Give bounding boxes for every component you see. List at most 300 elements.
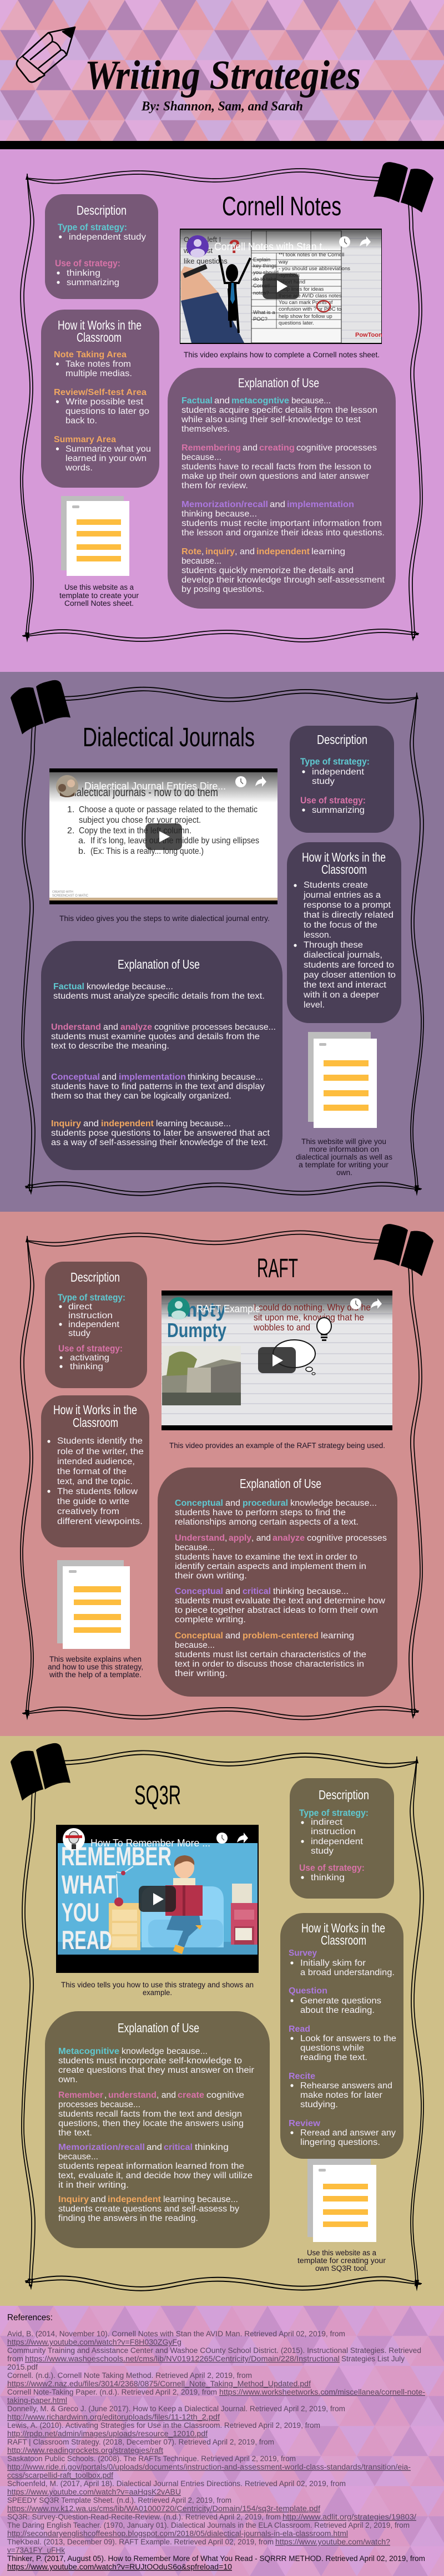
- panel: explanation of use: learning because...: [163, 2195, 238, 2204]
- title: Writing Strategies: [85, 53, 361, 98]
- video: How To Remember More: How To Remember More ...: [90, 1838, 210, 1849]
- panel: explanation of use: thinking because...: [188, 1072, 263, 1082]
- caption: website link: a template for writing your: [299, 1161, 389, 1169]
- frame and book icon: [11, 680, 423, 1196]
- reference list: Community Training and Assistance Center and Washoe COunty School District. (2015). Instructional Strategies. Retrieved: [7, 2346, 421, 2355]
- caption: website link: template for creating your: [297, 2256, 386, 2265]
- black divider band: [0, 141, 444, 149]
- panel: how it works: Read: [289, 2025, 310, 2034]
- panel: description: Type of strategy:: [299, 1808, 369, 1818]
- reference list: https://www2.naz.edu/files/3014/2368/0875/Cornell_Note_Taking_Method_Updated.pdf: [7, 2380, 311, 2388]
- panel: explanation of use: analyze: [120, 1023, 152, 1032]
- panel: how it works: Classroom: [321, 862, 367, 877]
- panel: how it works: Summarize what you: [65, 444, 151, 454]
- video: Cornell Notes with Stan: POC?: [253, 316, 268, 322]
- panel: explanation of use: students recall facts from the text and design: [58, 2109, 242, 2119]
- panel: explanation of use: students have to recall facts from the lesson to: [181, 462, 371, 472]
- panel: how it works: different viewpoints.: [57, 1517, 143, 1526]
- caption: video: example.: [143, 1988, 172, 1997]
- panel: how it works: How it Works in the: [301, 1921, 385, 1935]
- panel: explanation of use: because...: [175, 1641, 215, 1650]
- panel: how it works: pay closer attention to: [304, 970, 396, 980]
- references heading: References:: [7, 2313, 53, 2322]
- panel: explanation of use: relationships among certain aspects of a text.: [175, 1517, 359, 1527]
- video: Dialectical Journal Entries: a.: [78, 836, 85, 846]
- panel: explanation of use: , and: [251, 1534, 271, 1543]
- panel: explanation of use: students have to perform steps to find the: [175, 1508, 346, 1517]
- icon: document: [57, 1560, 130, 1649]
- reference list: https://www.youtube.com/watch?v=aaHqsK2vABU: [7, 2488, 181, 2496]
- heading: Cornell Notes: Cornell Notes: [222, 192, 341, 221]
- panel: explanation of use: critical: [164, 2143, 193, 2152]
- caption: website link: [297, 2249, 386, 2273]
- panel: description: thinking: [67, 269, 100, 278]
- panel: how it works: dialectical journals,: [304, 950, 382, 960]
- panel: description: Use of strategy:: [299, 1863, 365, 1873]
- caption: website link: more information on: [309, 1145, 379, 1153]
- panel: description: direct: [68, 1302, 93, 1312]
- panel: explanation of use: own.: [58, 2075, 78, 2084]
- reference list: [7, 2330, 425, 2571]
- panel: description: [45, 1262, 147, 1388]
- panel: explanation of use: students must list certain characteristics of the: [175, 1650, 366, 1659]
- panel: explanation of use: apply: [229, 1534, 251, 1543]
- panel: how it works: journal entries as a: [303, 890, 381, 900]
- panel: explanation of use: independent: [101, 1119, 154, 1128]
- video: Cornell Notes with Stan: -symbols: [279, 272, 300, 279]
- panel: how it works: make notes for later: [300, 2091, 382, 2100]
- video: Cornell Notes with Stan: do to take: [253, 276, 276, 282]
- reference list: http://secondaryenglishcoffeeshop.blogspot.com/2018/05/dialectical-journals-in-ela-classroom.html: [7, 2529, 348, 2538]
- panel: explanation of use: Remembering: [181, 443, 241, 453]
- panel: explanation of use: Understand: [51, 1023, 101, 1032]
- reference list: Thinker, P. (2017, August 05). How to Remember More of What You Read - SQRRR METHOD. Retrieved April 02, 2019, from: [7, 2554, 425, 2563]
- panel: description: independent: [312, 767, 365, 777]
- panel: how it works: [41, 1395, 149, 1547]
- panel: how it works: words.: [65, 463, 93, 473]
- panel: explanation of use: them so that they can be logically organized.: [51, 1091, 231, 1101]
- reference list: Donnelly, M. & Greco J. (June 2017). How to Keep a Dialectical Journal. Retrieved April 2, 2019, from: [7, 2405, 345, 2413]
- video: Cornell Notes with Stan: help show for follow up: [279, 313, 332, 320]
- panel: description: Type of strategy:: [300, 757, 370, 767]
- panel: how it works: lesson.: [304, 930, 331, 940]
- panel: how it works: studying.: [300, 2100, 338, 2109]
- panel: description: independent: [311, 1837, 364, 1846]
- panel: description: thinking: [311, 1873, 345, 1882]
- panel: explanation of use: students have to find patterns in the text and display: [51, 1082, 265, 1091]
- panel: explanation of use: [158, 1467, 397, 1697]
- panel: how it works: Write possible test: [65, 397, 144, 407]
- reference list: from: [7, 2355, 23, 2363]
- frame and book icon: [11, 1743, 423, 2291]
- panel: explanation of use: because...: [175, 1543, 215, 1552]
- reference list: 2015.pdf: [7, 2363, 38, 2371]
- panel: explanation of use: and: [214, 396, 230, 406]
- caption: video: [61, 1981, 254, 1997]
- video: Cornell Notes with Stan: like questions: [184, 257, 228, 265]
- panel: explanation of use: creating: [259, 443, 295, 453]
- panel: explanation of use: thinking because...: [273, 1587, 349, 1596]
- panel: explanation of use: Rote: [181, 547, 201, 556]
- section: SQ3R: [0, 1736, 444, 2306]
- panel: explanation of use: identify certain aspects and implement them in: [175, 1562, 366, 1571]
- panel: explanation of use: because...: [181, 453, 221, 462]
- panel: how it works: How it Works in the: [58, 318, 142, 332]
- panel: explanation of use: the lesson and organize their ideas into questions.: [181, 528, 385, 538]
- panel: explanation of use: them for review.: [181, 481, 248, 490]
- panel: description: independent: [68, 1320, 120, 1329]
- panel: explanation of use: ,: [225, 1534, 227, 1543]
- panel: description: summarizing: [67, 278, 119, 287]
- header banner with triangle pattern: [0, 0, 444, 141]
- panel: how it works: Through these: [304, 940, 363, 950]
- reference list: TheKbeal. (2013, December 09). RAFT Example. Retrieved April 02, 2019, from: [7, 2538, 274, 2546]
- video: Cornell Notes with Stan: ?: [229, 236, 240, 257]
- video: How To Remember More: YOU: [62, 1897, 99, 1927]
- panel: explanation of use: independent: [108, 2195, 161, 2204]
- reference list: https://www.youtube.com/watch?v=F8H030ZGyFg: [7, 2338, 181, 2346]
- reference list: Strategies List July: [341, 2355, 405, 2363]
- panel: how it works: Survey: [289, 1949, 317, 1958]
- video: Cornell Notes with Stan: What is a: [253, 310, 275, 316]
- panel: explanation of use: ,: [104, 2091, 107, 2100]
- panel: description: independent study: [69, 232, 146, 242]
- video: Dialectical Journal Entries: Choose a quote or passage related to the thematic: [79, 805, 258, 814]
- video: Cornell Notes with Stan: key things: [253, 263, 277, 269]
- panel: explanation of use: create questions that they must answer on their: [58, 2066, 254, 2075]
- panel: explanation of use: while also using their self-knowledge to test: [181, 415, 361, 424]
- panel: how it works: Review: [289, 2119, 321, 2128]
- panel: how it works: Generate questions: [300, 1996, 381, 2006]
- panel: explanation of use: thinking: [195, 2143, 229, 2152]
- panel: explanation of use: implementation: [119, 1072, 186, 1082]
- panel: how it works: with it on a deeper: [303, 990, 379, 1000]
- panel: explanation of use: students must analyze specific details from the text.: [53, 991, 265, 1001]
- panel: how it works: the guide to write: [57, 1497, 129, 1506]
- panel: description: study: [311, 1846, 334, 1856]
- panel: how it works: that is directly related: [304, 910, 393, 920]
- panel: explanation of use: Explanation of Use: [118, 2021, 199, 2035]
- heading: RAFT: RAFT: [257, 1254, 298, 1283]
- caption: website link: own SQ3R tool.: [315, 2264, 368, 2273]
- panel: explanation of use: because...: [181, 556, 221, 566]
- reference list: http://www.readingrockets.org/strategies/raft: [7, 2446, 163, 2454]
- panel: explanation of use: students repeat information learned from the: [58, 2162, 244, 2171]
- caption: website link: Use this website as a: [307, 2249, 376, 2257]
- panel: explanation of use: Conceptual: [175, 1499, 223, 1508]
- panel: explanation of use: students must examine quotes and details from the: [51, 1032, 260, 1041]
- panel: explanation of use: text, evaluate it, and decide how they will utilize: [58, 2171, 253, 2180]
- panel: description: Type of strategy:: [58, 222, 127, 232]
- video: Cornell Notes with Stan: write test: [183, 246, 213, 255]
- panel: explanation of use: and: [225, 1587, 240, 1596]
- panel: explanation of use: and: [147, 2143, 162, 2152]
- reference list: Cornell Note-Taking Paper. (n.d.). Retrieved April 2, 2019, from: [7, 2388, 217, 2396]
- panel: description: Use of strategy:: [58, 1344, 123, 1354]
- panel: description: Description: [319, 1788, 369, 1802]
- caption: website link: [48, 1655, 143, 1679]
- panel: how it works: lingering questions.: [300, 2138, 380, 2147]
- panel: explanation of use: Inquiry: [58, 2195, 89, 2204]
- section: RAFT: [0, 1212, 444, 1736]
- reference list: http://www.adlit.org/strategies/19803/: [282, 2513, 416, 2521]
- panel: explanation of use: and: [225, 1499, 240, 1508]
- panel: how it works: learned in your own: [65, 454, 147, 463]
- caption: website link: [296, 1137, 392, 1177]
- panel: description: [290, 726, 394, 833]
- caption: template link: Cornell Notes sheet.: [64, 599, 134, 608]
- panel: explanation of use: procedural: [243, 1499, 288, 1508]
- reference list: Saskatoon Public Schools. (2008). The RAFTs Technique. Retrieved April 2, 2019, from: [7, 2454, 296, 2463]
- panel: explanation of use: , and: [157, 2091, 176, 2100]
- caption: video: This video explains how to complete a Cornell notes sheet.: [184, 351, 380, 359]
- panel: description: Use of strategy:: [55, 259, 120, 269]
- video: Cornell Notes with Stan: -short hand: [279, 279, 305, 285]
- video: How To Remember More: REMEMBER: [61, 1841, 171, 1871]
- panel: explanation of use: critical: [243, 1587, 271, 1596]
- panel: how it works: questions to later go: [65, 407, 149, 416]
- icon: document: [61, 496, 129, 576]
- panel: explanation of use: and: [102, 1072, 117, 1082]
- panel: how it works: questions while: [300, 2043, 364, 2053]
- video: Cornell Notes with Stan: You can mark Points of: [279, 300, 333, 306]
- panel: explanation of use: and: [270, 500, 285, 509]
- video: Dialectical Journal Entries: (Ex: This is a really... long quote.): [90, 847, 204, 856]
- reference list: Cornell. (n.d.). Cornell Note Taking Method. Retrieved April 2, 2019, from: [7, 2371, 252, 2380]
- panel: explanation of use: make up their own questions and later answer: [181, 472, 369, 481]
- panel: explanation of use: independent: [256, 547, 310, 556]
- panel: how it works: [41, 310, 159, 488]
- video: Cornell Notes with Stan: you should: [253, 270, 279, 276]
- heading: Dialectical Journals: Dialectical Journals: [83, 723, 255, 752]
- panel: explanation of use: it in their writing.: [58, 2180, 129, 2190]
- panel: description: instruction: [68, 1311, 113, 1320]
- panel: explanation of use: cognitive processes because...: [154, 1023, 276, 1032]
- caption: video: This video tells you how to use this strategy and shows an: [61, 1981, 254, 1989]
- reference list: http://www.ride.ri.gov/portals/0/uploads/documents/instruction-and-assessment-world-class-standards/transition/eia-: [7, 2463, 411, 2471]
- video: RAFT Example: I could do nothing. Why did he: [254, 1302, 371, 1313]
- panel: explanation of use: Metacognitive: [58, 2047, 119, 2056]
- caption: website link: This website explains when: [49, 1655, 142, 1663]
- panel: how it works: the format of the: [57, 1467, 127, 1476]
- panel: explanation of use: understand: [108, 2091, 157, 2100]
- panel: description: [290, 1778, 394, 1899]
- video: Dialectical Journal Entries: If it's long, leave out the middle by using ellipses: [90, 836, 259, 846]
- panel: how it works: Rehearse answers and: [300, 2081, 392, 2091]
- video: RAFT Example: sit upon me, knowing that he: [254, 1312, 364, 1323]
- panel: explanation of use: Conceptual: [175, 1587, 223, 1596]
- reference list: RAFT | Classroom Strategy. (2018, December 07). Retrieved April 2, 2019, from: [7, 2438, 274, 2446]
- panel: how it works: Take notes from: [65, 360, 131, 369]
- panel: explanation of use: students must evaluate the text and determine how: [175, 1596, 386, 1606]
- panel: explanation of use: knowledge because...: [290, 1499, 377, 1508]
- video: How To Remember More: [56, 1825, 259, 1973]
- panel: how it works: text, and the topic.: [57, 1477, 133, 1486]
- panel: explanation of use: students must incorporate self-knowledge to: [58, 2056, 242, 2066]
- panel: description: summarizing: [312, 806, 365, 815]
- video: Cornell Notes with Stan: **I took notes on the Cornell: [279, 252, 344, 258]
- panel: explanation of use: Conceptual: [175, 1631, 223, 1641]
- panel: description: activating: [70, 1353, 109, 1363]
- caption: template link: [59, 583, 139, 608]
- panel: how it works: How it Works in the: [302, 850, 386, 864]
- panel: explanation of use: develop their knowledge through self-assessment: [181, 575, 385, 585]
- reference list: Avid, B. (2014, November 10). Cornell Notes with Stan the AVID Man. Retrieved April 02, 2019, from: [7, 2330, 345, 2338]
- panel: explanation of use: and: [90, 2195, 106, 2204]
- panel: explanation of use: students must recite important information from: [181, 519, 382, 528]
- panel: description: study: [68, 1329, 90, 1338]
- video: Cornell Notes with Stan: Cornell: [253, 283, 270, 289]
- video: How To Remember More: WHAT: [62, 1870, 116, 1899]
- video: Cornell Notes with Stan: confusion with ? or POC to: [279, 306, 341, 312]
- panel: how it works: The students follow: [57, 1487, 138, 1496]
- panel: explanation of use: [168, 368, 396, 609]
- panel: how it works: creatively from: [57, 1507, 119, 1516]
- panel: explanation of use: the text.: [58, 2128, 92, 2138]
- panel: how it works: response to a prompt: [304, 900, 391, 910]
- reference list: http://rpdp.net/admin/images/uploads/resource_12010.pdf: [7, 2430, 208, 2438]
- section: Dialectical Journals: [0, 672, 444, 1212]
- reference list: The Daring English Teacher. (1970, January 01). Dialectical Journals in the ELA Classroom. Retrieved April 2, 2019, from: [7, 2521, 410, 2529]
- panel: explanation of use: students pose questions to later be answered that act: [51, 1128, 270, 1138]
- caption: website link: This website will give you: [301, 1137, 386, 1146]
- video: Cornell Notes with Stan: On the left I: [184, 235, 221, 244]
- panel: how it works: about the reading.: [300, 2006, 375, 2015]
- panel: explanation of use: [45, 2011, 270, 2248]
- panel: description: instruction: [311, 1827, 356, 1836]
- video: Dialectical Journal Entries: 2.: [67, 826, 74, 836]
- reference list: https://www.youtube.com/watch?v=RUJtOOduS6o&spfreload=10: [7, 2563, 232, 2571]
- panel: explanation of use: students create questions and self-assess by: [58, 2204, 239, 2214]
- section: Cornell Notes: [0, 149, 444, 672]
- heading: SQ3R: SQ3R: [134, 1781, 181, 1810]
- panel: how it works: Recite: [289, 2072, 315, 2081]
- video: RAFT Example: Empty: [167, 1298, 226, 1321]
- panel: how it works: a broad understanding.: [300, 1968, 395, 1977]
- video: Cornell Notes with Stan: PowToon: [355, 332, 382, 338]
- panel: explanation of use: Factual: [53, 982, 84, 991]
- video: RAFT Example: RAFT Example: [196, 1303, 260, 1314]
- panel: how it works: back to.: [65, 416, 97, 426]
- panel: how it works: Classroom: [321, 1933, 366, 1947]
- reference list: taking-paper.html: [7, 2396, 67, 2405]
- panel: explanation of use: Understand: [175, 1534, 225, 1543]
- reference list: Lewis, A. (2010). Activating Strategies for Use in the Classroom. Retrieved April 2, 2019, from: [7, 2421, 320, 2430]
- panel: how it works: role of the writer, the: [57, 1447, 144, 1456]
- video: Cornell Notes with Stan: [180, 229, 382, 344]
- video: Dialectical Journal Entries: b.: [78, 847, 85, 856]
- panel: explanation of use: Conceptual: [51, 1072, 100, 1082]
- video: Cornell Notes with Stan: these are AVID class notes: [279, 293, 342, 299]
- caption: video: This video provides an example of the RAFT strategy being used.: [169, 1441, 385, 1450]
- panel: description: study: [312, 777, 335, 786]
- reference list: https://www.worksheetworks.com/miscellanea/cornell-note-: [219, 2388, 425, 2396]
- panel: how it works: Review/Self-test Area: [54, 388, 147, 397]
- video: Dialectical Journal Entries: subject you chose for your project.: [79, 816, 201, 825]
- panel: explanation of use: inquiry: [205, 547, 235, 556]
- panel: how it works: Summary Area: [54, 435, 116, 444]
- panel: how it works: to the focus of the: [304, 920, 377, 930]
- panel: explanation of use: and: [225, 1631, 240, 1641]
- panel: explanation of use: questions, then they locate the answers using: [58, 2119, 244, 2128]
- section: references: [0, 2306, 444, 2576]
- caption: website link: with the help of a template.: [49, 1671, 142, 1679]
- video: Cornell Notes with Stan: -skip lines for ideas: [279, 286, 324, 292]
- panel: explanation of use: text to describe the meaning.: [51, 1041, 169, 1051]
- video: Cornell Notes with Stan: Cornell Notes with Stan t...: [214, 241, 330, 253]
- panel: explanation of use: cognitive processes: [307, 1534, 387, 1543]
- panel: explanation of use: and: [83, 1119, 99, 1128]
- panel: explanation of use: implementation: [287, 500, 354, 509]
- panel: how it works: students are forced to: [304, 960, 394, 970]
- panel: how it works: reading the text.: [300, 2053, 367, 2062]
- panel: description: Use of strategy:: [300, 796, 366, 806]
- caption: template link: template to create your: [59, 591, 139, 600]
- video: Cornell Notes with Stan: questions later.: [279, 320, 314, 326]
- panel: explanation of use: problem-centered: [243, 1631, 319, 1641]
- panel: explanation of use: [41, 941, 282, 1170]
- panel: explanation of use: Inquiry: [51, 1119, 81, 1128]
- panel: how it works: the text and interact: [304, 980, 387, 990]
- caption: website link: dialectical journals as well as: [296, 1153, 392, 1161]
- panel: how it works: Students create: [304, 880, 368, 890]
- panel: explanation of use: knowledge because...: [122, 2047, 208, 2056]
- panel: explanation of use: analyze: [273, 1534, 305, 1543]
- panel: explanation of use: their own writing.: [175, 1571, 247, 1581]
- panel: explanation of use: learning because...: [156, 1119, 231, 1128]
- panel: description: Type of strategy:: [58, 1293, 125, 1303]
- panel: explanation of use: Explanation of Use: [118, 957, 200, 971]
- panel: explanation of use: students acquire specific details from the lesson: [181, 406, 377, 415]
- byline: By: Shannon, Sam, and Sarah: [141, 99, 303, 114]
- panel: explanation of use: learning: [311, 547, 345, 556]
- reference list: SPEEDY SQ3R Template Sheet. (n.d.). Retrieved April 2, 2019, from: [7, 2496, 231, 2504]
- panel: explanation of use: , and: [235, 547, 255, 556]
- panel: how it works: How it Works in the: [53, 1403, 137, 1417]
- panel: description: Description: [77, 203, 127, 217]
- panel: explanation of use: and: [243, 443, 258, 453]
- panel: how it works: intended audience,: [57, 1457, 135, 1466]
- panel: description: thinking: [70, 1362, 103, 1371]
- panel: explanation of use: because...: [291, 396, 331, 406]
- panel: explanation of use: thinking because...: [181, 509, 257, 519]
- panel: how it works: level.: [304, 1000, 325, 1010]
- panel: how it works: Classroom: [77, 330, 122, 345]
- panel: how it works: Note Taking Area: [54, 350, 127, 360]
- panel: how it works: [287, 842, 401, 1023]
- panel: description: indirect: [311, 1818, 343, 1827]
- panel: explanation of use: complete writing.: [175, 1615, 246, 1624]
- video: Cornell Notes with Stan: notes?: [253, 290, 269, 296]
- panel: explanation of use: to piece together abstract ideas to form their own: [175, 1606, 378, 1615]
- reference list: https://www.washoeschools.net/cms/lib/NV01912265/Centricity/Domain/228/Instructional: [25, 2355, 340, 2363]
- reference list: https://www.youtube.com/watch?: [275, 2538, 390, 2546]
- caption: template link: Use this website as a: [64, 583, 134, 591]
- panel: how it works: Initially skim for: [300, 1958, 366, 1968]
- video: RAFT Example: [162, 1290, 392, 1430]
- video: Dialectical Journal Entries: SCREENCAST O MATIC: [52, 894, 88, 898]
- video: RAFT Example: Dumpty: [167, 1319, 226, 1342]
- video: Dialectical Journal Entries: Copy the text in the left column.: [79, 826, 191, 836]
- video: Cornell Notes with Stan: way: [278, 259, 288, 265]
- video: Dialectical Journal Entries: ialectical journals - how to do them: [74, 786, 218, 799]
- reference list: https://www.nv.k12.wa.us/cms/lib/WA01000720/Centricity/Domain/154/sq3r-template.pdf: [7, 2504, 320, 2513]
- reference list: SQ3R: Survey-Question-Read-Recite-Review. (n.d.). Retrieved April 2, 2019, from: [7, 2513, 281, 2521]
- panel: explanation of use: their writing.: [175, 1669, 228, 1678]
- video: How To Remember More: READ: [62, 1925, 112, 1955]
- panel: explanation of use: metacogntive: [231, 396, 289, 406]
- frame and book icon: [21, 1224, 433, 1720]
